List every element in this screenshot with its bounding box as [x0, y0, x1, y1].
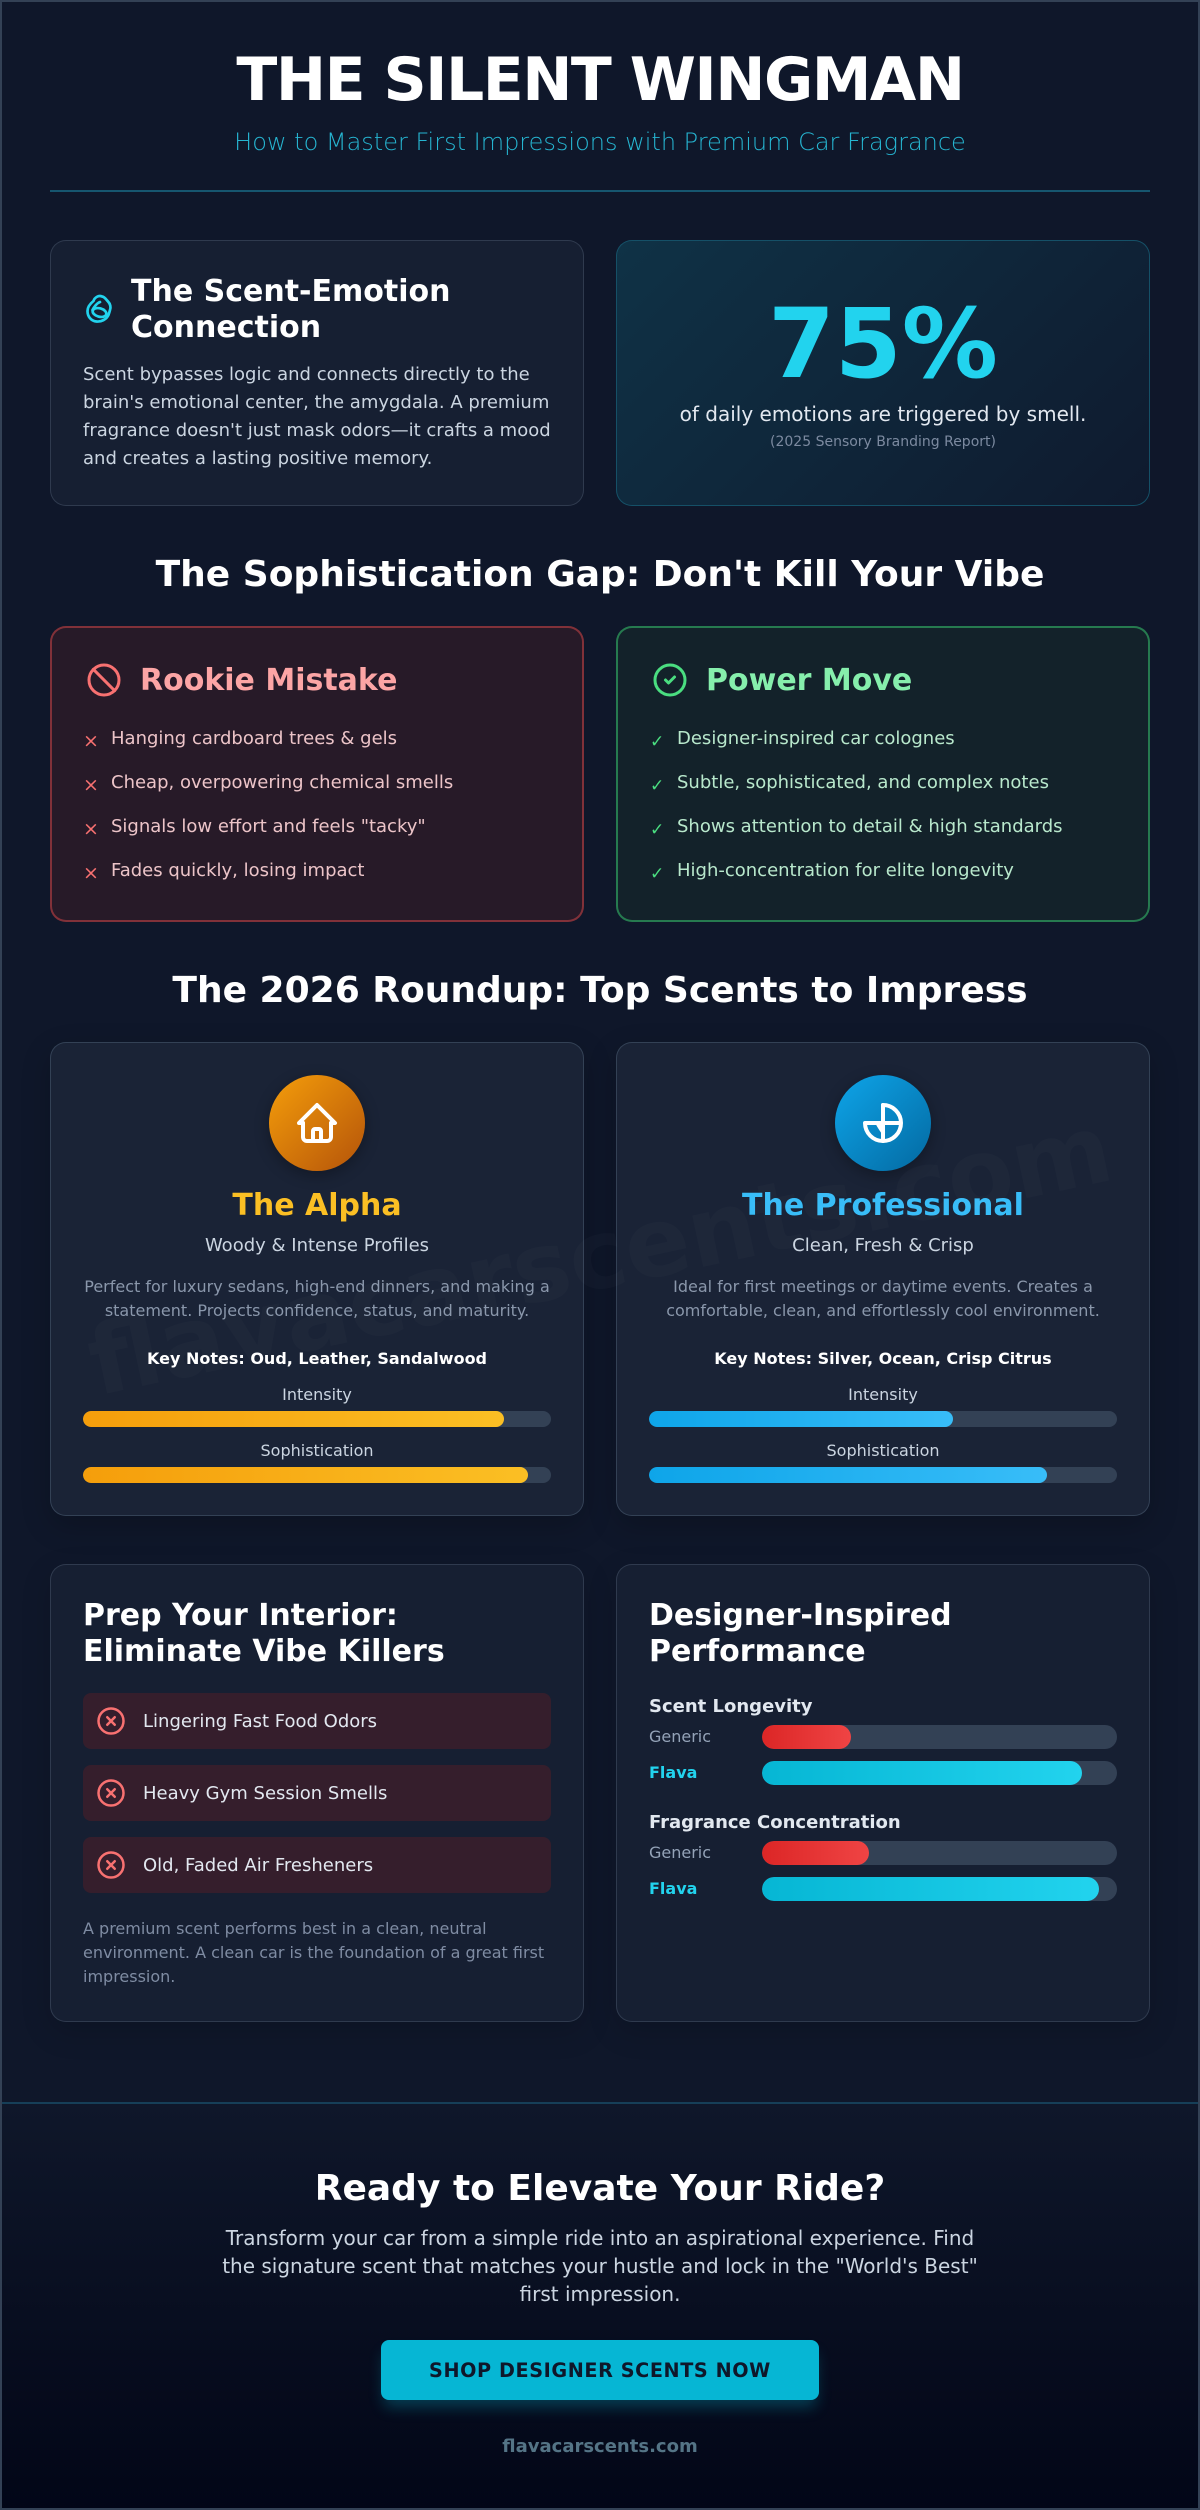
heading: 2026 roundup: The 2026 Roundup: Top Scents to Impress: [172, 970, 1028, 1011]
label: intensity: Intensity: [848, 1385, 918, 1404]
icon: check circle: [654, 664, 686, 696]
list item: ×: [83, 818, 99, 840]
bar: sophistication: [83, 1467, 551, 1483]
heading: Eliminate Vibe Killers: [83, 1634, 445, 1669]
vibe killer item: [83, 1837, 551, 1893]
subtitle: How to Master First Impressions with Premium Car Fragrance: [234, 128, 966, 156]
icon: brain swirl: [86, 294, 112, 323]
panel: the scent-emotion connection: [50, 240, 584, 506]
row label: flava: Flava: [649, 1879, 697, 1898]
panel: rookie mistake: [50, 626, 584, 922]
description: Ideal for first meetings or daytime events. Creates a: [673, 1277, 1093, 1296]
bar: intensity: [649, 1411, 1117, 1427]
heading: Rookie Mistake: [140, 663, 397, 698]
profile name: The Alpha: [232, 1188, 402, 1223]
heading: Designer-Inspired: [649, 1598, 952, 1633]
key notes: Key Notes: Silver, Ocean, Crisp Citrus: [714, 1349, 1052, 1368]
list item: ×: [83, 730, 99, 752]
footnote: impression.: [83, 1967, 175, 1986]
list item: High-concentration for elite longevity: [677, 860, 1014, 881]
heading: Prep Your Interior:: [83, 1598, 398, 1633]
cta button: SHOP DESIGNER SCENTS NOW: [429, 2359, 771, 2382]
row label: generic: Generic: [649, 1727, 711, 1746]
body text: fragrance doesn't just mask odors—it crafts a mood: [83, 420, 551, 441]
row label: flava: Flava: [649, 1763, 697, 1782]
list item: ✓: [650, 820, 664, 840]
call to action section: [0, 2102, 1200, 2510]
list item: Hanging cardboard trees & gels: [111, 728, 397, 749]
key notes: Key Notes: Oud, Leather, Sandalwood: [147, 1349, 487, 1368]
heading: [649, 1598, 952, 1669]
heading: Performance: [649, 1634, 866, 1669]
cta text: Transform your car from a simple ride into an aspirational experience. Find: [226, 2226, 974, 2250]
heading: Power Move: [706, 663, 912, 698]
vibe killer item: [83, 1765, 551, 1821]
label: sophistication: Sophistication: [826, 1441, 940, 1460]
body text: [83, 364, 551, 469]
stat source: (2025 Sensory Branding Report): [770, 434, 996, 450]
chart: fragrance concentration: [649, 1812, 1117, 1901]
chart label: Scent Longevity: [649, 1696, 813, 1717]
heading: [83, 1598, 445, 1669]
bar: flava 90%: [762, 1761, 1117, 1785]
body text: and creates a lasting positive memory.: [83, 448, 432, 469]
row label: generic: Generic: [649, 1843, 711, 1862]
bar: intensity: [83, 1411, 551, 1427]
panel: power move: [616, 626, 1150, 922]
list item: Shows attention to detail & high standards: [677, 816, 1063, 837]
panel: the professional: [616, 1042, 1150, 1516]
list item: ×: [83, 862, 99, 884]
profile type: Woody & Intense Profiles: [205, 1235, 429, 1256]
description: [84, 1277, 550, 1320]
header: [234, 45, 966, 156]
list item: ✓: [650, 776, 664, 796]
panel: the alpha: [50, 1042, 584, 1516]
description: comfortable, clean, and effortlessly cool environment.: [666, 1301, 1100, 1320]
cta text: the signature scent that matches your hustle and lock in the "World's Best": [222, 2254, 978, 2278]
vibe killer item: Heavy Gym Session Smells: [143, 1783, 387, 1804]
list item: Designer-inspired car colognes: [677, 728, 955, 749]
cta text: first impression.: [520, 2282, 680, 2306]
body text: brain's emotional center, the amygdala. A premium: [83, 392, 549, 413]
vibe killer item: [83, 1693, 551, 1749]
description: Perfect for luxury sedans, high-end dinners, and making a: [84, 1277, 550, 1296]
bar: generic 25%: [762, 1725, 1117, 1749]
cta text: [222, 2226, 978, 2306]
bar: generic 30%: [762, 1841, 1117, 1865]
footnote: A premium scent performs best in a clean, neutral: [83, 1919, 487, 1938]
vibe killer item: Old, Faded Air Fresheners: [143, 1855, 373, 1876]
footnote: environment. A clean car is the foundation of a great first: [83, 1943, 544, 1962]
bar: flava 95%: [762, 1877, 1117, 1901]
stat caption: of daily emotions are triggered by smell.: [680, 402, 1086, 426]
chart: scent longevity: [649, 1696, 1117, 1785]
big number: 75%: [768, 288, 998, 400]
list item: Subtle, sophisticated, and complex notes: [677, 772, 1049, 793]
heading: Connection: [131, 310, 321, 345]
list item: Signals low effort and feels "tacky": [111, 816, 426, 837]
chart label: Fragrance Concentration: [649, 1812, 901, 1833]
profile name: The Professional: [742, 1188, 1024, 1223]
description: [666, 1277, 1100, 1320]
label: sophistication: Sophistication: [260, 1441, 374, 1460]
icon: leaf quarter: [835, 1075, 931, 1171]
description: statement. Projects confidence, status, and maturity.: [105, 1301, 529, 1320]
heading: [131, 274, 450, 345]
list item: Cheap, overpowering chemical smells: [111, 772, 453, 793]
title: THE SILENT WINGMAN: [236, 45, 964, 115]
panel: prep your interior: [50, 1564, 584, 2022]
watermark: flavacarscents.com: [79, 1092, 1121, 1418]
cta button: [381, 2340, 819, 2400]
icon: ban: [88, 664, 120, 696]
profile type: Clean, Fresh & Crisp: [792, 1235, 974, 1256]
label: intensity: Intensity: [282, 1385, 352, 1404]
list item: ×: [83, 774, 99, 796]
cta heading: Ready to Elevate Your Ride?: [315, 2168, 885, 2209]
bar: sophistication: [649, 1467, 1117, 1483]
panel: 75% statistic: [616, 240, 1150, 506]
vibe killer item: Lingering Fast Food Odors: [143, 1711, 377, 1732]
heading: sophistication gap: The Sophistication Gap: Don't Kill Your Vibe: [156, 554, 1044, 595]
footer url: flavacarscents.com: [502, 2436, 698, 2457]
list item: ✓: [650, 732, 664, 752]
list item: Fades quickly, losing impact: [111, 860, 364, 881]
panel: designer-inspired performance: [616, 1564, 1150, 2022]
heading: The Scent-Emotion: [131, 274, 450, 309]
list item: ✓: [650, 864, 664, 884]
footnote: [83, 1919, 544, 1986]
icon: home: [269, 1075, 365, 1171]
body text: Scent bypasses logic and connects directly to the: [83, 364, 530, 385]
